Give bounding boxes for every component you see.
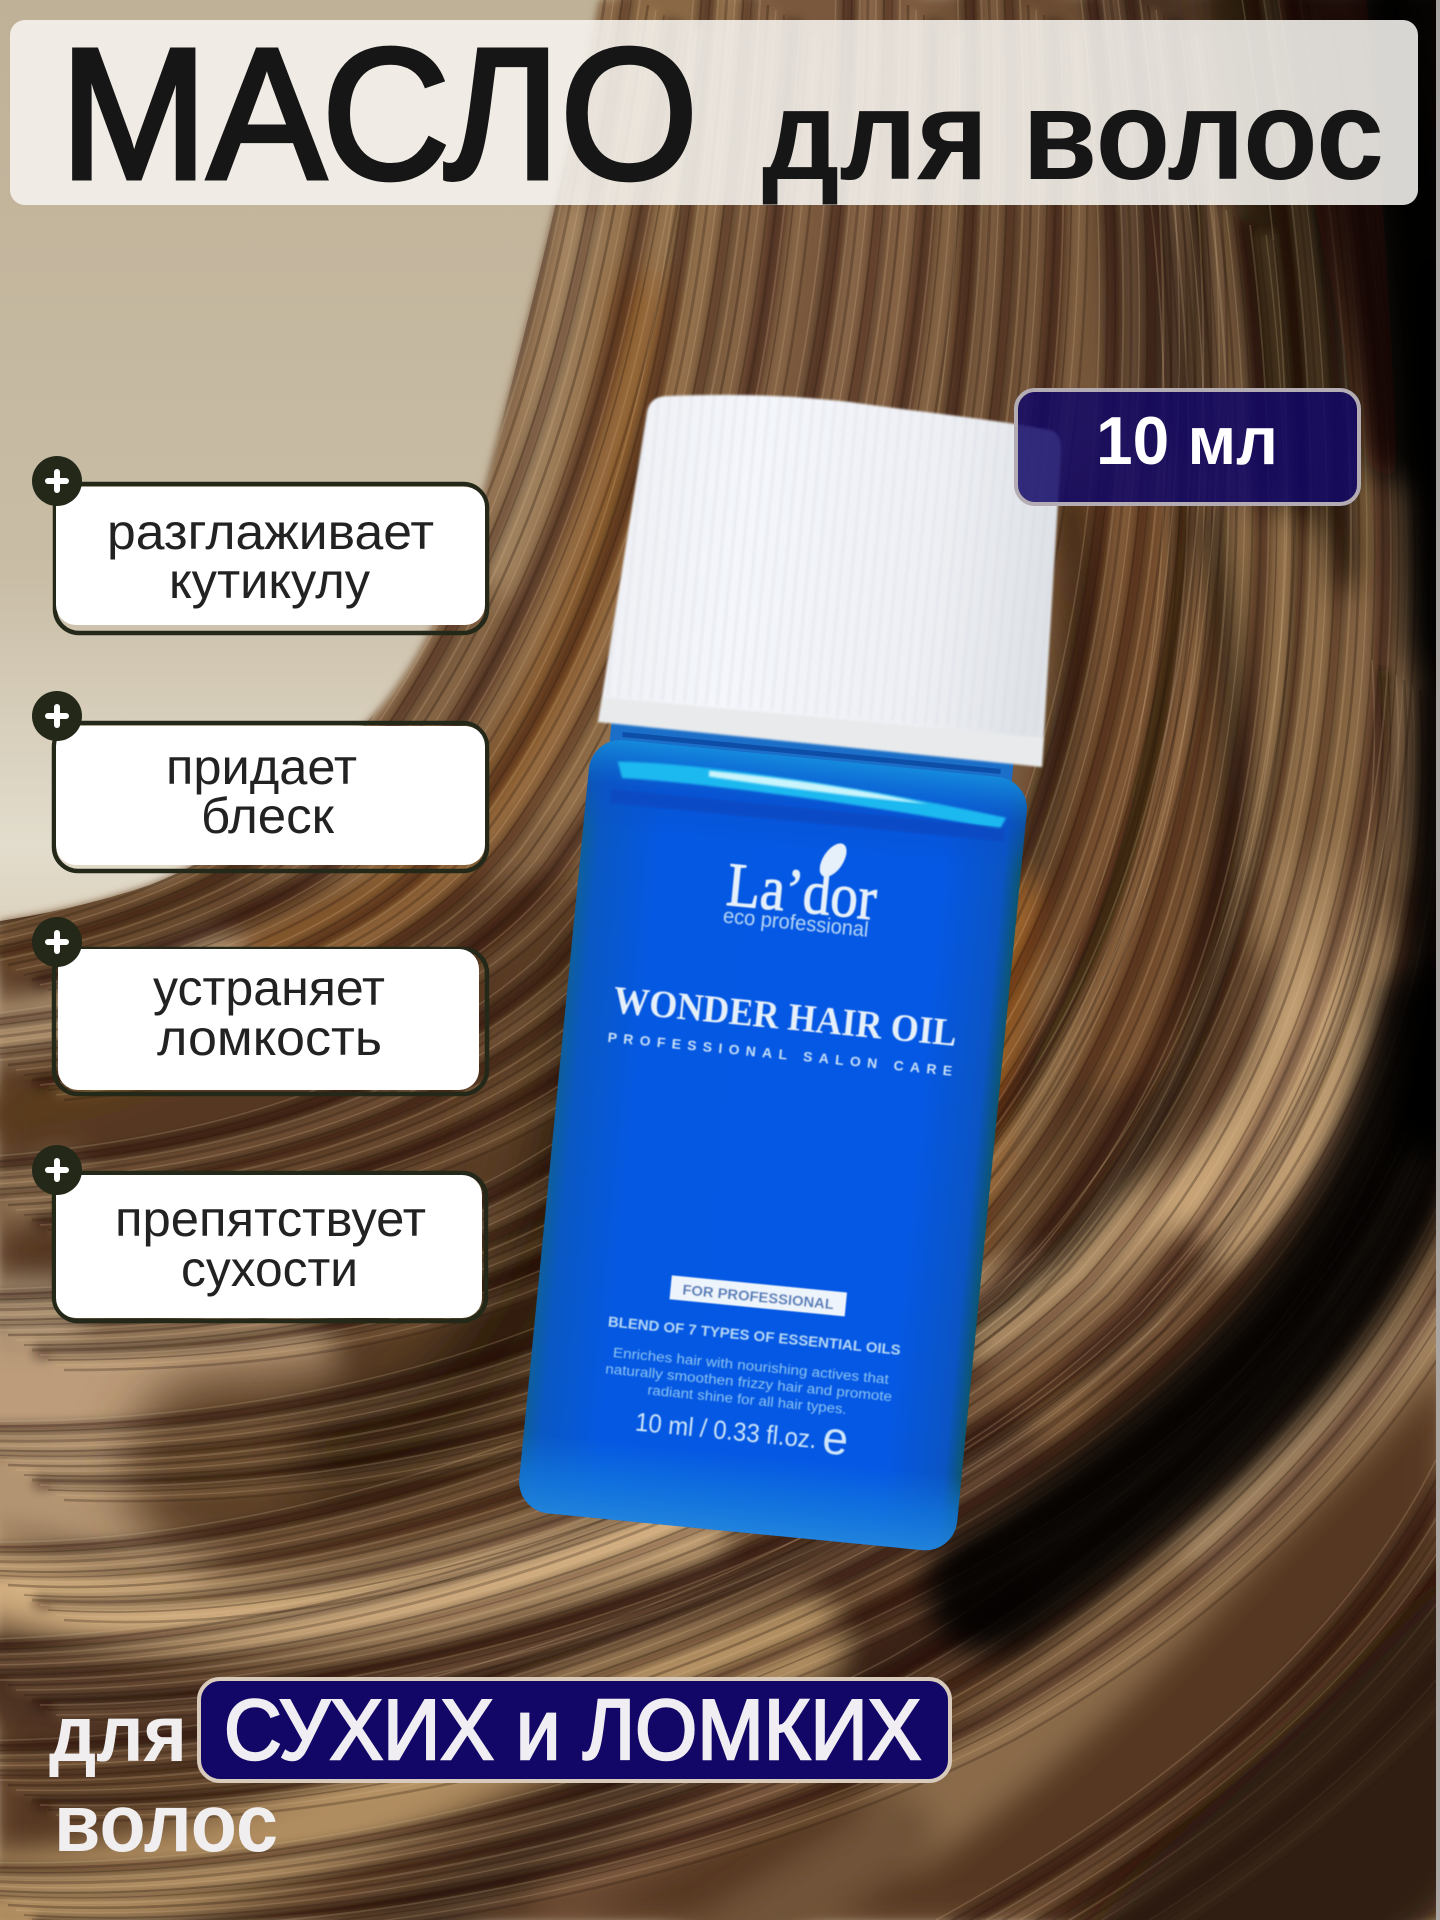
icon: plus badge <box>32 691 82 741</box>
feature card: устраняет ломкость: ломкость <box>157 1010 382 1066</box>
caption word: волос: волос <box>54 1778 278 1869</box>
bottle label text: 10 ml / 0.33 fl.oz. <box>634 1407 818 1454</box>
bottle cap <box>598 395 1061 767</box>
volume badge: 10 мл <box>1016 390 1359 504</box>
subtitle для волос: для волос <box>762 64 1384 207</box>
icon: leaf <box>814 839 852 881</box>
feature card: разглаживает кутикулу: разглаживает <box>107 504 434 560</box>
bottle neck and body <box>516 711 1032 1553</box>
header banner <box>10 11 1418 218</box>
icon: plus badge <box>32 1145 82 1195</box>
bottle label text: eco professional <box>722 905 870 942</box>
feature card: препятствует сухости: сухости <box>181 1241 358 1297</box>
bottle label text: PROFESSIONAL SALON CARE <box>607 1029 953 1079</box>
feature card: устраняет ломкость: устраняет <box>153 960 385 1016</box>
caption word: для: для <box>49 1689 187 1778</box>
product bottle <box>516 395 1061 1553</box>
feature card: придает блеск <box>32 691 487 871</box>
bottle label text: naturally smoothen frizzy hair and promote <box>605 1361 893 1404</box>
icon: plus badge <box>32 456 82 506</box>
bottle label text: BLEND OF 7 TYPES OF ESSENTIAL OILS <box>607 1313 901 1359</box>
bottle label text: FOR PROFESSIONAL <box>682 1282 835 1313</box>
bottle label text: La’dor <box>724 851 880 933</box>
feature card: придает блеск: придает <box>166 739 357 795</box>
bottle label text: e <box>820 1411 851 1465</box>
feature card: препятствует сухости: препятствует <box>115 1191 426 1247</box>
feature card: препятствует сухости <box>32 1145 486 1321</box>
bottle label text: WONDER HAIR OIL <box>611 978 959 1055</box>
bottle label text: Enriches hair with nourishing actives that <box>612 1345 890 1387</box>
highlight pill: СУХИХ и ЛОМКИХ: СУХИХ и ЛОМКИХ <box>224 1683 921 1778</box>
feature card: придает блеск: блеск <box>201 788 335 844</box>
feature card: разглаживает кутикулу: кутикулу <box>169 553 370 609</box>
feature card: устраняет ломкость <box>32 917 487 1094</box>
bottom caption <box>49 1679 950 1869</box>
feature card: разглаживает кутикулу <box>32 456 487 633</box>
icon: plus badge <box>32 917 82 967</box>
bottle label text <box>568 819 975 1472</box>
title word МАСЛО: МАСЛО <box>60 11 698 218</box>
volume badge: 10 мл: 10 мл <box>1096 403 1278 479</box>
bottle label text: radiant shine for all hair types. <box>647 1383 847 1417</box>
